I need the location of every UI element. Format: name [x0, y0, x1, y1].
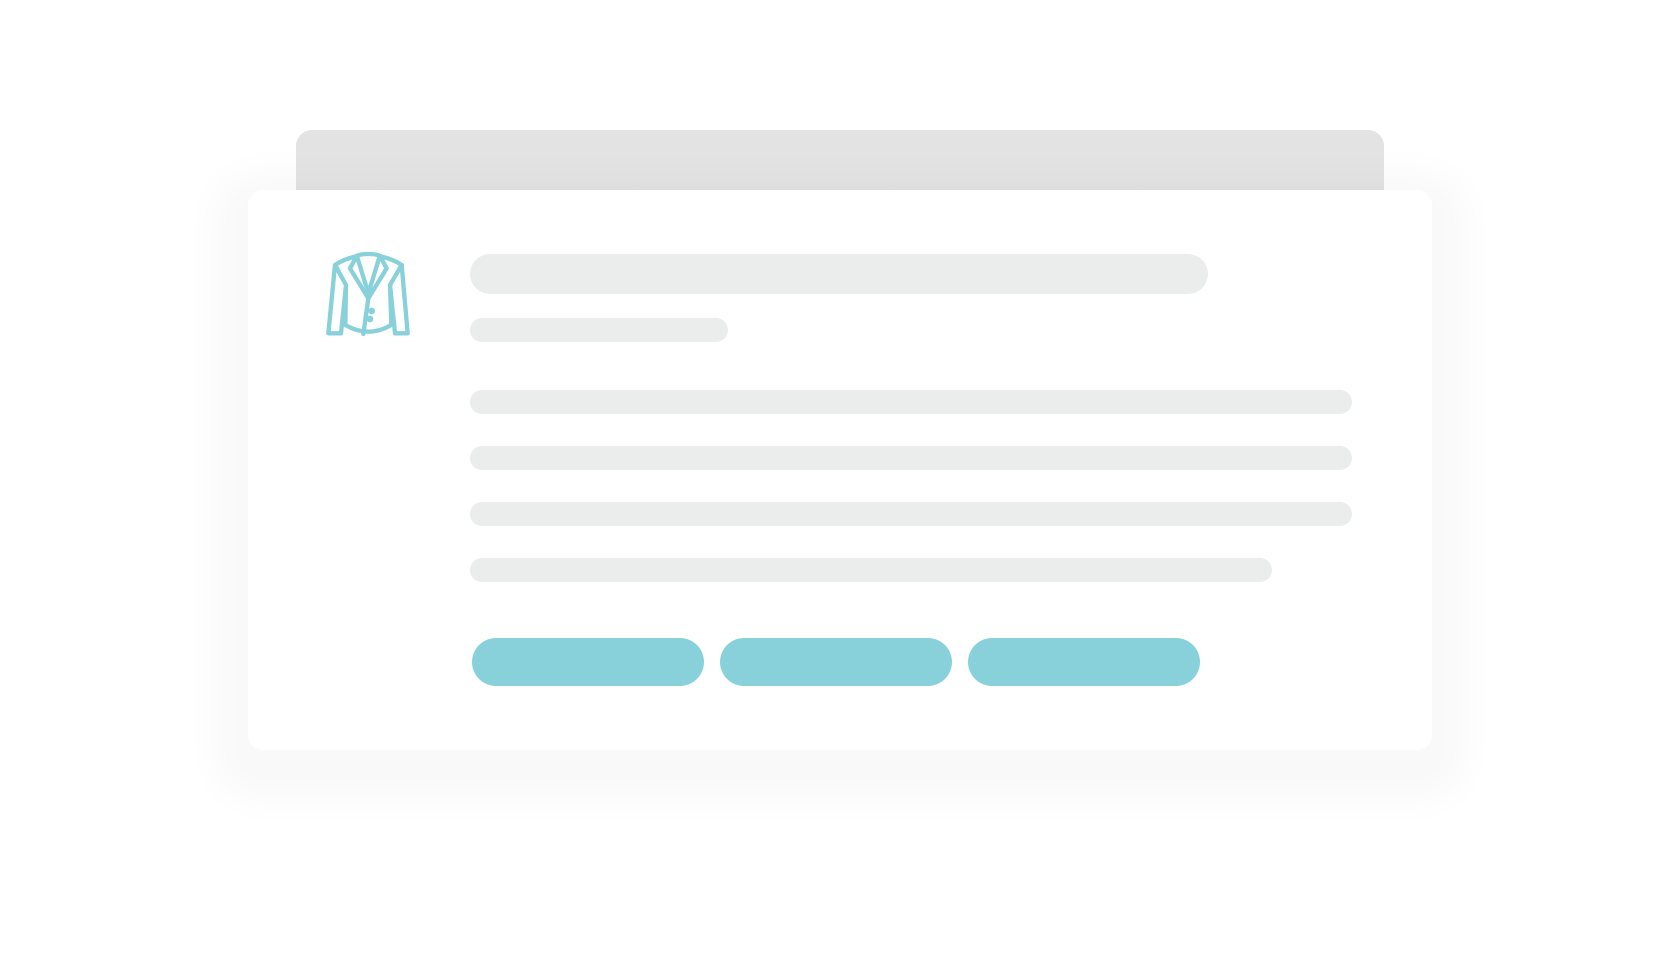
text line placeholder 1: [470, 390, 1352, 414]
card shadow: [248, 190, 1432, 750]
text line placeholder 4: [470, 558, 1272, 582]
text line placeholder 3: [470, 502, 1352, 526]
heading placeholder bar: [470, 254, 1208, 294]
icon: blazer jacket: [326, 252, 410, 336]
button 2: [720, 638, 952, 686]
text line placeholder 2: [470, 446, 1352, 470]
panel: back card: [296, 130, 1384, 190]
button 1: [472, 638, 704, 686]
panel: front card: [248, 190, 1432, 750]
button 3: [968, 638, 1200, 686]
subheading placeholder bar: [470, 318, 728, 342]
